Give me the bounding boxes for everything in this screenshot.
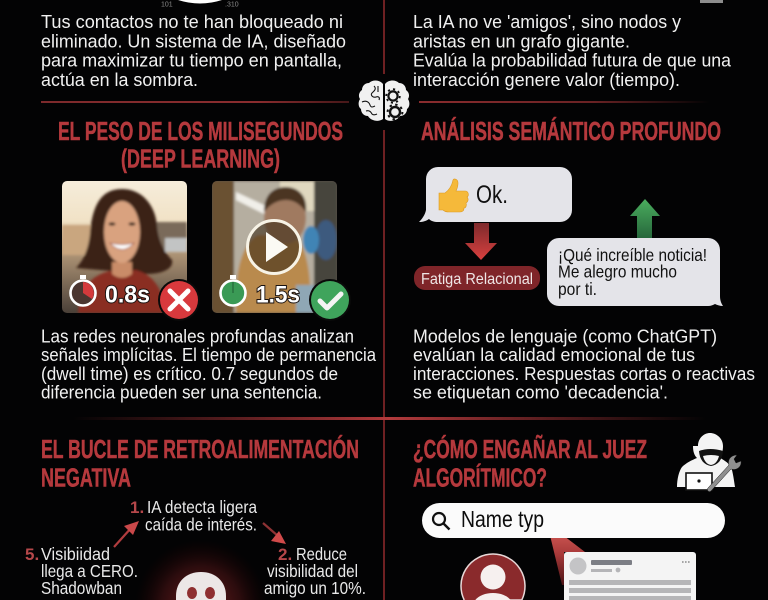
icon: lower gear — [388, 105, 402, 119]
text block: grafo: Evalúa la probabilidad futura de que una — [413, 50, 732, 70]
top graphic remnants: .310 — [225, 2, 239, 8]
icon: upper gear — [386, 89, 400, 103]
text block: modelos de lenguaje: Modelos de lenguaje (como ChatGPT) — [413, 326, 717, 346]
step 1: 1. — [130, 498, 144, 517]
step 5: Shadowban — [41, 578, 122, 598]
icon: green check — [309, 279, 351, 321]
text block: contactos: Tus contactos no te han bloqueado ni — [41, 11, 343, 32]
text block: grafo: interacción genere valor (tiempo). — [413, 69, 680, 90]
heading: bucle de retroalimentacion: EL BUCLE DE RETROALIMENTACIÓN — [41, 434, 359, 464]
label: 1.5s: 1.5s — [256, 282, 300, 308]
arrow: step 1 to 2 — [263, 523, 286, 544]
bubble: que increible noticia: por ti. — [558, 279, 597, 299]
loop diagram — [25, 497, 366, 600]
icon: brain with gears — [352, 74, 412, 130]
ghost glow — [135, 540, 267, 600]
step 5 — [25, 544, 138, 598]
step 2 — [264, 544, 366, 598]
profile avatar — [461, 554, 525, 600]
arrow: down red — [465, 223, 497, 260]
text block: redes neuronales: diferencia pueden ser una sentencia. — [41, 382, 322, 402]
bubble: que increible noticia: ¡Qué increíble noticia! — [558, 245, 707, 265]
step 1 — [130, 497, 257, 534]
heading: como enganar: ¿CÓMO ENGAÑAR AL JUEZ — [413, 434, 647, 464]
step 5: 5. — [25, 545, 39, 564]
top graphic remnants — [161, 0, 723, 8]
text block: contactos — [41, 11, 346, 90]
text block: redes neuronales — [41, 326, 377, 402]
arrow: step 5 to 1 — [114, 521, 139, 547]
text block: grafo: La IA no ve 'amigos', sino nodos y — [413, 11, 682, 32]
step 1: IA detecta ligera — [147, 497, 257, 517]
photo: smiling woman 0.8s — [62, 181, 200, 321]
chat diagram — [414, 167, 723, 306]
text block: modelos de lenguaje: evalúan la calidad emocional de tus — [413, 344, 695, 365]
text block: modelos de lenguaje — [413, 326, 755, 402]
pill: fatiga relacional — [414, 266, 540, 290]
section dividers — [41, 101, 709, 103]
text block: redes neuronales: (dwell time) es crítico. 0.7 segundos de — [41, 363, 338, 384]
text block: contactos: eliminado. Un sistema de IA, diseñado — [41, 30, 346, 52]
bubble: que increible noticia: Me alegro mucho — [558, 262, 677, 282]
post card — [564, 552, 696, 600]
step 2: amigo un 10%. — [264, 578, 366, 598]
icon: play button — [248, 220, 300, 274]
top graphic remnants: 101 — [161, 2, 173, 8]
step 2: visibilidad del — [267, 561, 358, 581]
bubble: Ok — [419, 167, 572, 222]
horizontal divider — [73, 417, 706, 420]
heading: el peso de los milisegundos: EL PESO DE LOS MILISEGUNDOS — [58, 116, 343, 146]
text block: redes neuronales: Las redes neuronales profundas analizan — [41, 326, 354, 346]
icon: ghost — [176, 572, 226, 600]
photo: video man 1.5s — [212, 181, 351, 321]
icon: stopwatch red — [70, 275, 96, 306]
heading: como enganar — [413, 434, 647, 492]
icon: thumbs up — [439, 179, 468, 212]
step 1: caída de interés. — [145, 514, 257, 534]
vertical center divider — [383, 0, 385, 600]
wedge: pointer highlight — [547, 523, 585, 585]
text block: grafo: aristas en un grafo gigante. — [413, 30, 630, 52]
text block: contactos: actúa en la sombra. — [41, 69, 198, 90]
heading: el peso de los milisegundos: (DEEP LEARNING) — [121, 144, 280, 174]
search bar — [422, 503, 725, 538]
icon: hacker with wrench — [677, 433, 741, 492]
search bar: Name typ — [461, 506, 544, 532]
heading: como enganar: ALGORÍTMICO? — [413, 462, 547, 492]
pill: fatiga relacional: Fatiga Relacional — [421, 271, 533, 288]
heading: bucle de retroalimentacion: NEGATIVA — [41, 462, 131, 492]
text block: grafo — [413, 11, 732, 90]
search autocomplete diagram — [422, 503, 725, 600]
text block: redes neuronales: señales implícitas. El tiempo de permanencia — [41, 344, 377, 365]
arrow: up green — [630, 199, 660, 240]
icon: red cross — [158, 279, 200, 321]
step 2: 2. — [278, 545, 292, 564]
heading: el peso de los milisegundos — [58, 116, 343, 174]
icon: stopwatch green — [220, 275, 246, 306]
step 5: Visibiidad — [41, 544, 110, 564]
text block: contactos: para maximizar tu tiempo en pantalla, — [41, 50, 342, 70]
text block: modelos de lenguaje: se etiquetan como 'decadencia'. — [413, 382, 668, 402]
label: 0.8s: 0.8s — [105, 282, 150, 308]
bubble: que increible noticia — [547, 238, 723, 306]
label: Ok: Ok. — [476, 181, 508, 209]
step 5: llega a CERO. — [41, 561, 138, 581]
step 2: Reduce — [296, 544, 347, 564]
heading: bucle de retroalimentacion — [41, 434, 359, 492]
